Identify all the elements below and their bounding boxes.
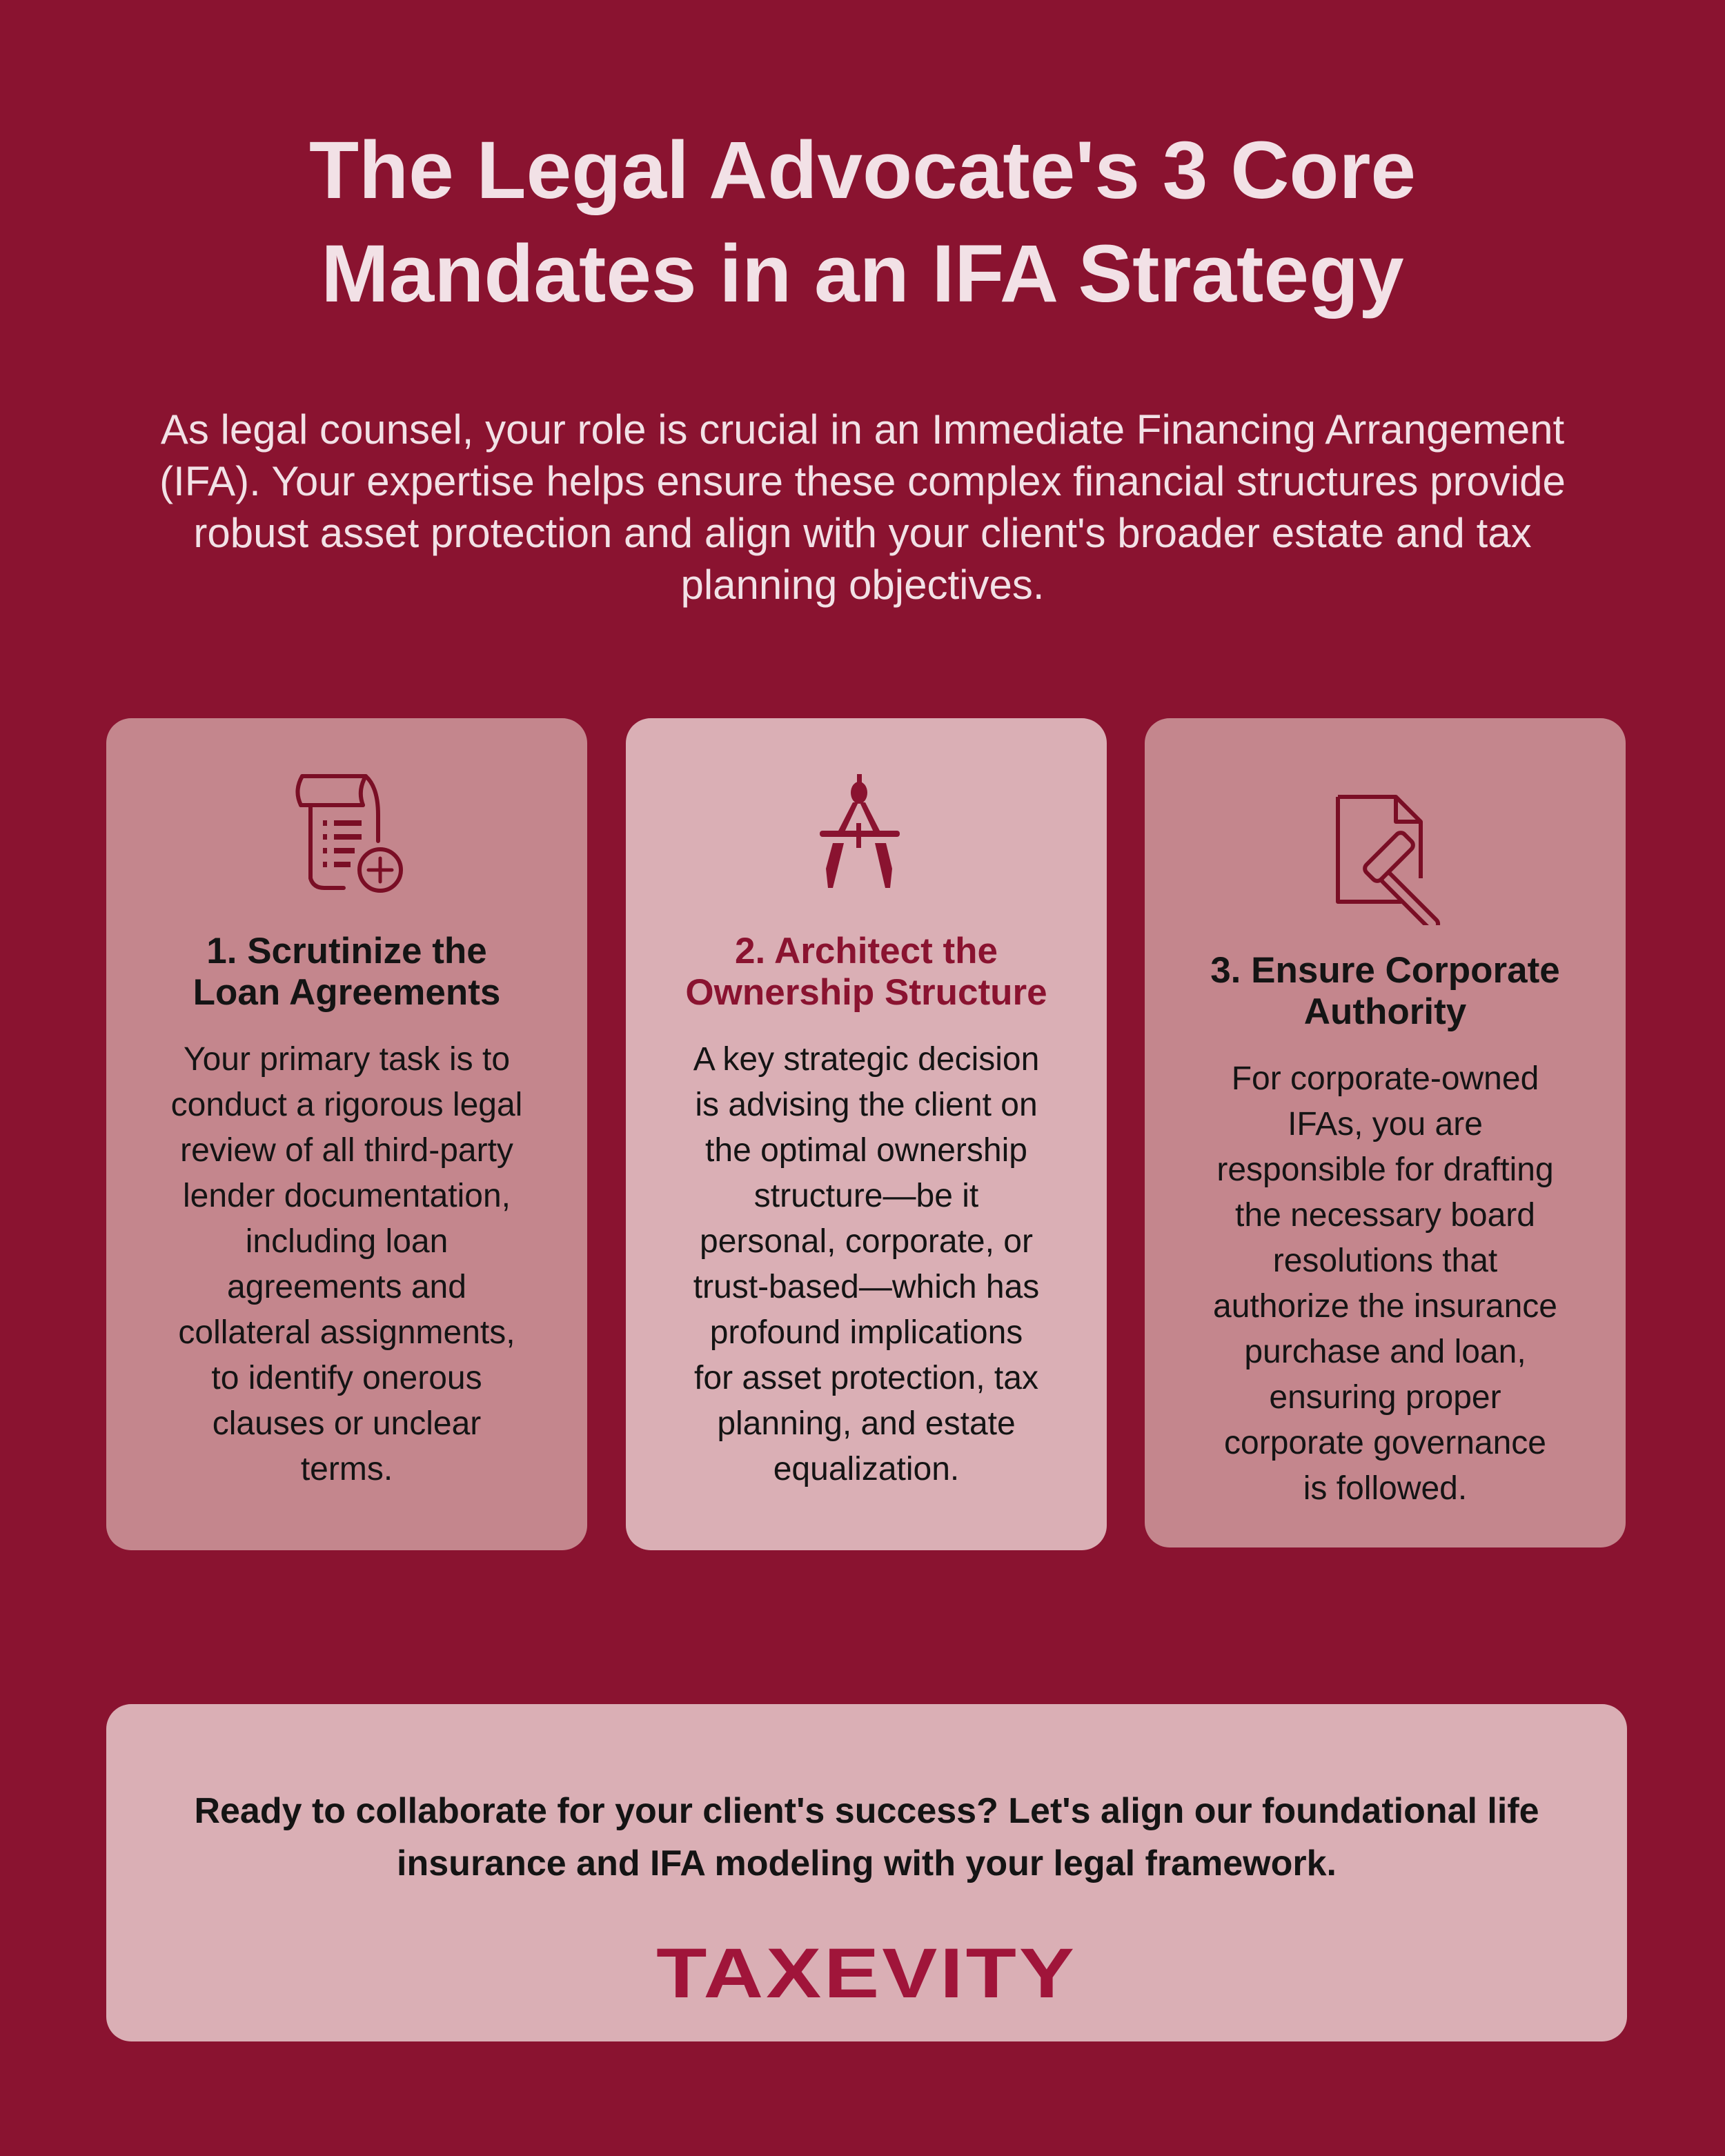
body 1: including loan [246, 1223, 448, 1260]
body 1: to identify onerous [211, 1360, 482, 1396]
logo: TAXEVITY: TAXEVITY [656, 1934, 1077, 2012]
body 3 [1213, 1060, 1557, 1507]
body 2: equalization. [773, 1451, 959, 1487]
panel: card 3 [1145, 718, 1626, 1547]
callout: CTA box [106, 1704, 1627, 2041]
body 1: terms. [301, 1451, 393, 1487]
title: Mandates in an IFA Strategy [321, 228, 1404, 319]
panel: card 1 [106, 718, 587, 1550]
body 2: planning, and estate [717, 1405, 1016, 1442]
body 2: A key strategic decision [693, 1041, 1039, 1078]
heading 2: 2. Architect the [735, 931, 998, 971]
icon: document with gavel [1336, 795, 1441, 925]
heading 3: 3. Ensure Corporate [1210, 950, 1560, 991]
heading 3: Authority [1304, 991, 1466, 1032]
title: The Legal Advocate's 3 Core [309, 125, 1416, 216]
body 3: purchase and loan, [1244, 1334, 1526, 1370]
heading 1: Loan Agreements [193, 972, 500, 1013]
body 1: review of all third-party [180, 1132, 513, 1169]
body 2: profound implications [710, 1314, 1023, 1351]
CTA text [194, 1791, 1539, 1883]
heading 2: Ownership Structure [685, 972, 1047, 1013]
heading 3 [1210, 950, 1560, 1032]
intro text: robust asset protection and align with your client's broader estate and tax [193, 510, 1532, 556]
body 1: conduct a rigorous legal [171, 1087, 522, 1123]
body 3: For corporate-owned [1232, 1060, 1539, 1097]
body 2: for asset protection, tax [694, 1360, 1038, 1396]
heading 2 [685, 931, 1047, 1013]
body 3: is followed. [1303, 1470, 1467, 1507]
intro text [159, 406, 1566, 608]
body 1: agreements and [227, 1269, 466, 1305]
body 3: IFAs, you are [1288, 1106, 1483, 1143]
CTA text: insurance and IFA modeling with your legal framework. [397, 1843, 1337, 1883]
body 3: the necessary board [1235, 1197, 1535, 1234]
panel: card 2 [626, 718, 1107, 1550]
body 2: trust-based—which has [693, 1269, 1039, 1305]
body 3: authorize the insurance [1213, 1288, 1557, 1325]
body 1: Your primary task is to [184, 1041, 510, 1078]
body 2: the optimal ownership [705, 1132, 1027, 1169]
body 3: resolutions that [1273, 1243, 1497, 1279]
heading 1: 1. Scrutinize the [206, 931, 487, 971]
intro text: As legal counsel, your role is crucial in an Immediate Financing Arrangement [161, 406, 1564, 453]
body 2 [693, 1041, 1039, 1487]
body 1: collateral assignments, [178, 1314, 515, 1351]
CTA text: Ready to collaborate for your client's success? Let's align our foundational life [194, 1791, 1539, 1831]
body 2: structure—be it [754, 1178, 978, 1214]
body 3: ensuring proper [1269, 1379, 1501, 1416]
icon: scroll with plus [295, 774, 403, 893]
body 2: is advising the client on [695, 1087, 1038, 1123]
title [309, 125, 1416, 319]
body 1 [171, 1041, 522, 1487]
heading 1 [193, 931, 500, 1013]
intro text: planning objectives. [680, 562, 1045, 608]
body 2: personal, corporate, or [700, 1223, 1033, 1260]
body 1: lender documentation, [183, 1178, 511, 1214]
body 3: corporate governance [1224, 1425, 1546, 1461]
body 3: responsible for drafting [1216, 1151, 1554, 1188]
body 1: clauses or unclear [213, 1405, 481, 1442]
intro text: (IFA). Your expertise helps ensure these complex financial structures provide [159, 458, 1566, 504]
icon: drafting compass [820, 774, 900, 888]
